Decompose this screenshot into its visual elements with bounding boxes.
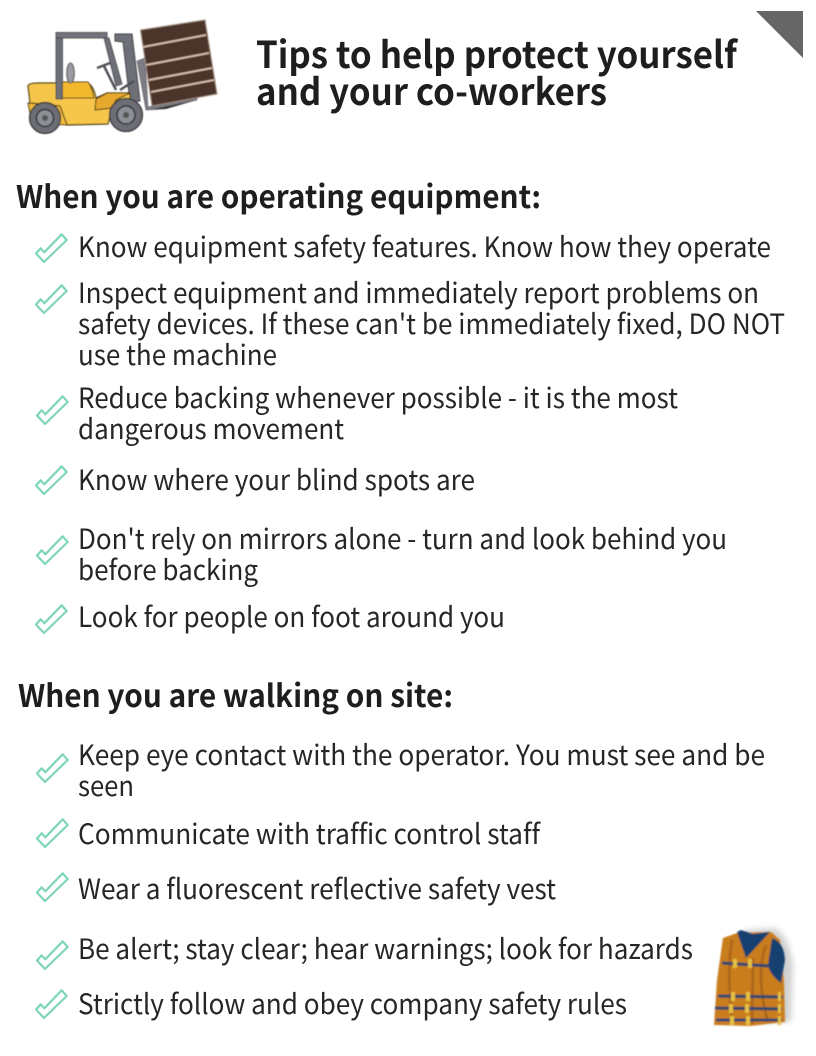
tip 4: Know where your blind spots are [78, 459, 475, 499]
tip 7 [37, 734, 765, 805]
icon: corner triangle [756, 11, 803, 58]
heading: operating equipment: When you are operating equipment: [16, 172, 541, 217]
title: and your co-workers [256, 62, 607, 116]
tip 5: Don't rely on mirrors alone - turn and look behind you [78, 518, 727, 558]
title [256, 25, 738, 116]
tip 10: Be alert; stay clear; hear warnings; look for hazards [78, 928, 693, 968]
tip 8: Communicate with traffic control staff [78, 813, 541, 853]
tip 3: Reduce backing whenever possible - it is the most [78, 377, 678, 417]
tip 6: Look for people on foot around you [78, 596, 505, 636]
tip 3: dangerous movement [78, 408, 344, 448]
tip 2: safety devices. If these can't be immediately fixed, DO NOT [78, 303, 785, 343]
tip 7: seen [78, 765, 134, 805]
tip 5 [37, 518, 727, 589]
icon: safety vest [714, 928, 793, 1026]
tip 1: Know equipment safety features. Know how they operate [78, 226, 771, 266]
heading: walking on site: When you are walking on site: [18, 671, 453, 716]
title: Tips to help protect yourself [256, 25, 738, 79]
tip 3 [37, 377, 678, 448]
tip 2: Inspect equipment and immediately report problems on [78, 272, 759, 312]
tip 2: use the machine [78, 334, 277, 374]
tip 5: before backing [78, 549, 258, 589]
panel: walking on site tips [36, 734, 765, 1023]
tip 7: Keep eye contact with the operator. You must see and be [78, 734, 765, 774]
panel: operating equipment tips [36, 226, 785, 636]
tip 11: Strictly follow and obey company safety rules [78, 983, 627, 1023]
tip 2 [36, 272, 785, 374]
icon: forklift with pallet [28, 20, 217, 134]
tip 9: Wear a fluorescent reflective safety vest [78, 868, 556, 908]
